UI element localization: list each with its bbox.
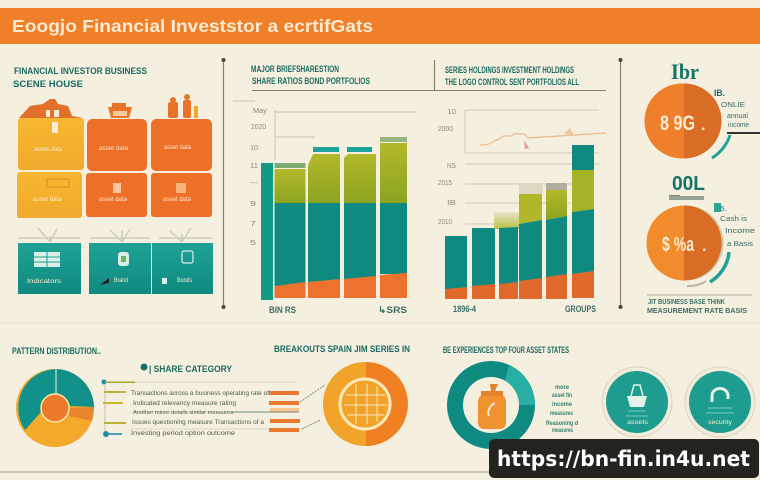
grey arc	[687, 281, 706, 286]
icon badge: lock	[685, 367, 755, 437]
chart heading: MAJOR BRIEFSHARESTION	[251, 64, 339, 74]
heading: BREAKOUTS SPAIN JIM SERIES IN	[274, 344, 410, 354]
card: teal middle	[89, 243, 151, 294]
stat heading: Ibr	[671, 59, 699, 84]
y axis labels: 2015	[438, 180, 452, 187]
panel: product cards	[13, 66, 213, 294]
footnote	[647, 295, 752, 315]
caption	[546, 385, 578, 434]
side labels: ONLIE	[721, 102, 745, 109]
panel: growth chart	[425, 65, 606, 314]
card: orange top middle: asset data	[99, 146, 129, 152]
card: teal left: Indicators	[27, 279, 61, 285]
heading: PATTERN DISTRIBUTION..	[12, 346, 101, 356]
card: teal middle: Brand	[114, 278, 128, 284]
y axis labels	[250, 108, 268, 247]
legend rows text: Investing period option outcome	[131, 430, 235, 437]
panel heading: FINANCIAL INVESTOR BUSINESS	[14, 66, 147, 76]
bars	[445, 145, 594, 299]
side labels: a Basis	[727, 241, 754, 248]
side labels	[714, 203, 755, 248]
url watermark	[489, 439, 759, 478]
y axis labels: 2020	[251, 124, 266, 131]
footnote: MEASUREMENT RATE BASIS	[647, 308, 747, 315]
y axis labels: May	[253, 108, 268, 115]
panel: stacked bar chart	[233, 64, 425, 315]
icon: sprout decorations	[18, 228, 212, 242]
y axis labels: 5	[250, 240, 256, 247]
title: Eoogjo Financial Investstor a ecrtifGats	[12, 16, 373, 36]
icon: building roofs	[19, 94, 198, 118]
icon: orange jar	[478, 384, 506, 429]
x axis labels: 1896-4	[453, 304, 476, 314]
side labels: IB.	[714, 88, 725, 98]
caption: asset fin	[552, 393, 572, 399]
side labels: 5.	[720, 206, 727, 213]
caption: income	[552, 402, 573, 408]
card: yellow top: assets data	[34, 147, 63, 153]
donut	[323, 362, 408, 446]
y axis labels: 2010	[438, 219, 452, 226]
legend rows text: Indicated relevancy measure rating	[133, 400, 236, 407]
y axis labels: 9	[250, 201, 256, 208]
caption: more	[555, 385, 570, 391]
card: orange top middle	[87, 119, 147, 171]
url watermark: https://bn-fin.in4u.net	[497, 447, 750, 471]
chart heading	[445, 65, 579, 87]
chart heading: SHARE RATIOS BOND PORTFOLIOS	[252, 76, 370, 86]
y axis labels: 10	[250, 145, 258, 152]
panel: allocation donut	[12, 346, 101, 447]
heading: BE EXPERIENCES TOP FOUR ASSET STATES	[443, 345, 569, 355]
x axis labels	[453, 304, 596, 314]
orange circle	[646, 206, 724, 280]
card: orange top right: asset data	[164, 145, 192, 151]
chart heading: SERIES HOLDINGS INVESTMENT HOLDINGS	[445, 65, 574, 75]
x axis labels	[269, 305, 407, 315]
legend markers	[102, 380, 135, 437]
side labels: Cash is	[720, 216, 748, 223]
icon badge: basket: assets	[627, 420, 648, 426]
heading: | SHARE CATEGORY	[149, 364, 232, 374]
orange circle: $ %a	[662, 234, 695, 256]
orange ticks	[269, 391, 300, 432]
teal arc	[712, 135, 730, 158]
x axis labels: ↳SRS	[378, 305, 407, 315]
teal arc	[710, 252, 729, 282]
card: orange bottom right: asset data	[163, 197, 192, 203]
side labels: income	[728, 122, 749, 129]
icon badge: basket	[602, 367, 672, 437]
orange circle: .	[701, 117, 705, 134]
caption: measures	[550, 411, 574, 417]
pie chart	[16, 369, 94, 447]
legend rows text	[131, 390, 269, 437]
card: yellow bottom	[17, 172, 82, 218]
panel: legend list	[102, 364, 325, 437]
stat heading: 00L	[672, 173, 705, 195]
caption: measures	[552, 428, 573, 434]
y axis labels: 10	[447, 109, 456, 116]
chart heading	[251, 64, 370, 86]
x axis labels: GROUPS	[565, 304, 596, 314]
side labels	[714, 88, 760, 134]
card: teal right: Bonds	[177, 278, 192, 284]
panel: teal ring chart	[443, 345, 578, 449]
side labels: Income	[725, 228, 755, 235]
panel heading	[13, 66, 147, 89]
card: teal right	[152, 243, 213, 294]
thin teal bar	[261, 163, 273, 300]
header banner	[0, 8, 760, 44]
chart heading: THE LOGO CONTROL SENT PORTFOLIOS ALL	[445, 77, 579, 87]
side labels: annual	[727, 113, 748, 120]
legend rows text: Issues questioning measure Transactions of a	[132, 419, 264, 426]
card: teal left	[18, 243, 81, 294]
y axis labels: --	[250, 180, 259, 187]
x axis labels: BIN RS	[269, 305, 296, 315]
legend rows text: Another minor details similar measures	[133, 410, 234, 416]
card: orange bottom middle	[86, 173, 147, 217]
orange circle: .	[702, 238, 706, 255]
y axis labels	[438, 109, 456, 226]
footnote: JIT BUSINESS BASE THINK	[648, 299, 725, 306]
orange circle	[644, 84, 722, 158]
panel: orange coin chart	[274, 344, 410, 446]
legend rows text: Transactions across a business operating rate of	[131, 390, 269, 397]
panel: pie stat two	[646, 173, 755, 315]
bars	[274, 137, 407, 298]
card: orange bottom middle: asset data	[99, 197, 128, 203]
y axis labels: IB	[447, 200, 456, 207]
card: yellow top	[18, 118, 84, 170]
y axis labels: 11	[250, 163, 258, 170]
y axis labels: NS	[447, 163, 456, 170]
card: yellow bottom: asset data	[33, 197, 63, 203]
card: orange bottom right	[151, 173, 212, 217]
line chart	[480, 128, 606, 149]
y axis labels: 7	[250, 221, 256, 228]
card: orange top right	[151, 119, 212, 171]
orange circle: 8 9G	[660, 112, 695, 135]
panel heading: SCENE HOUSE	[13, 79, 83, 89]
y axis labels: 2000	[438, 126, 453, 133]
ring	[447, 361, 535, 449]
caption: Reasoning d	[546, 421, 578, 427]
icon badge: lock: security	[708, 420, 732, 426]
panel: pie stat one	[644, 59, 760, 158]
